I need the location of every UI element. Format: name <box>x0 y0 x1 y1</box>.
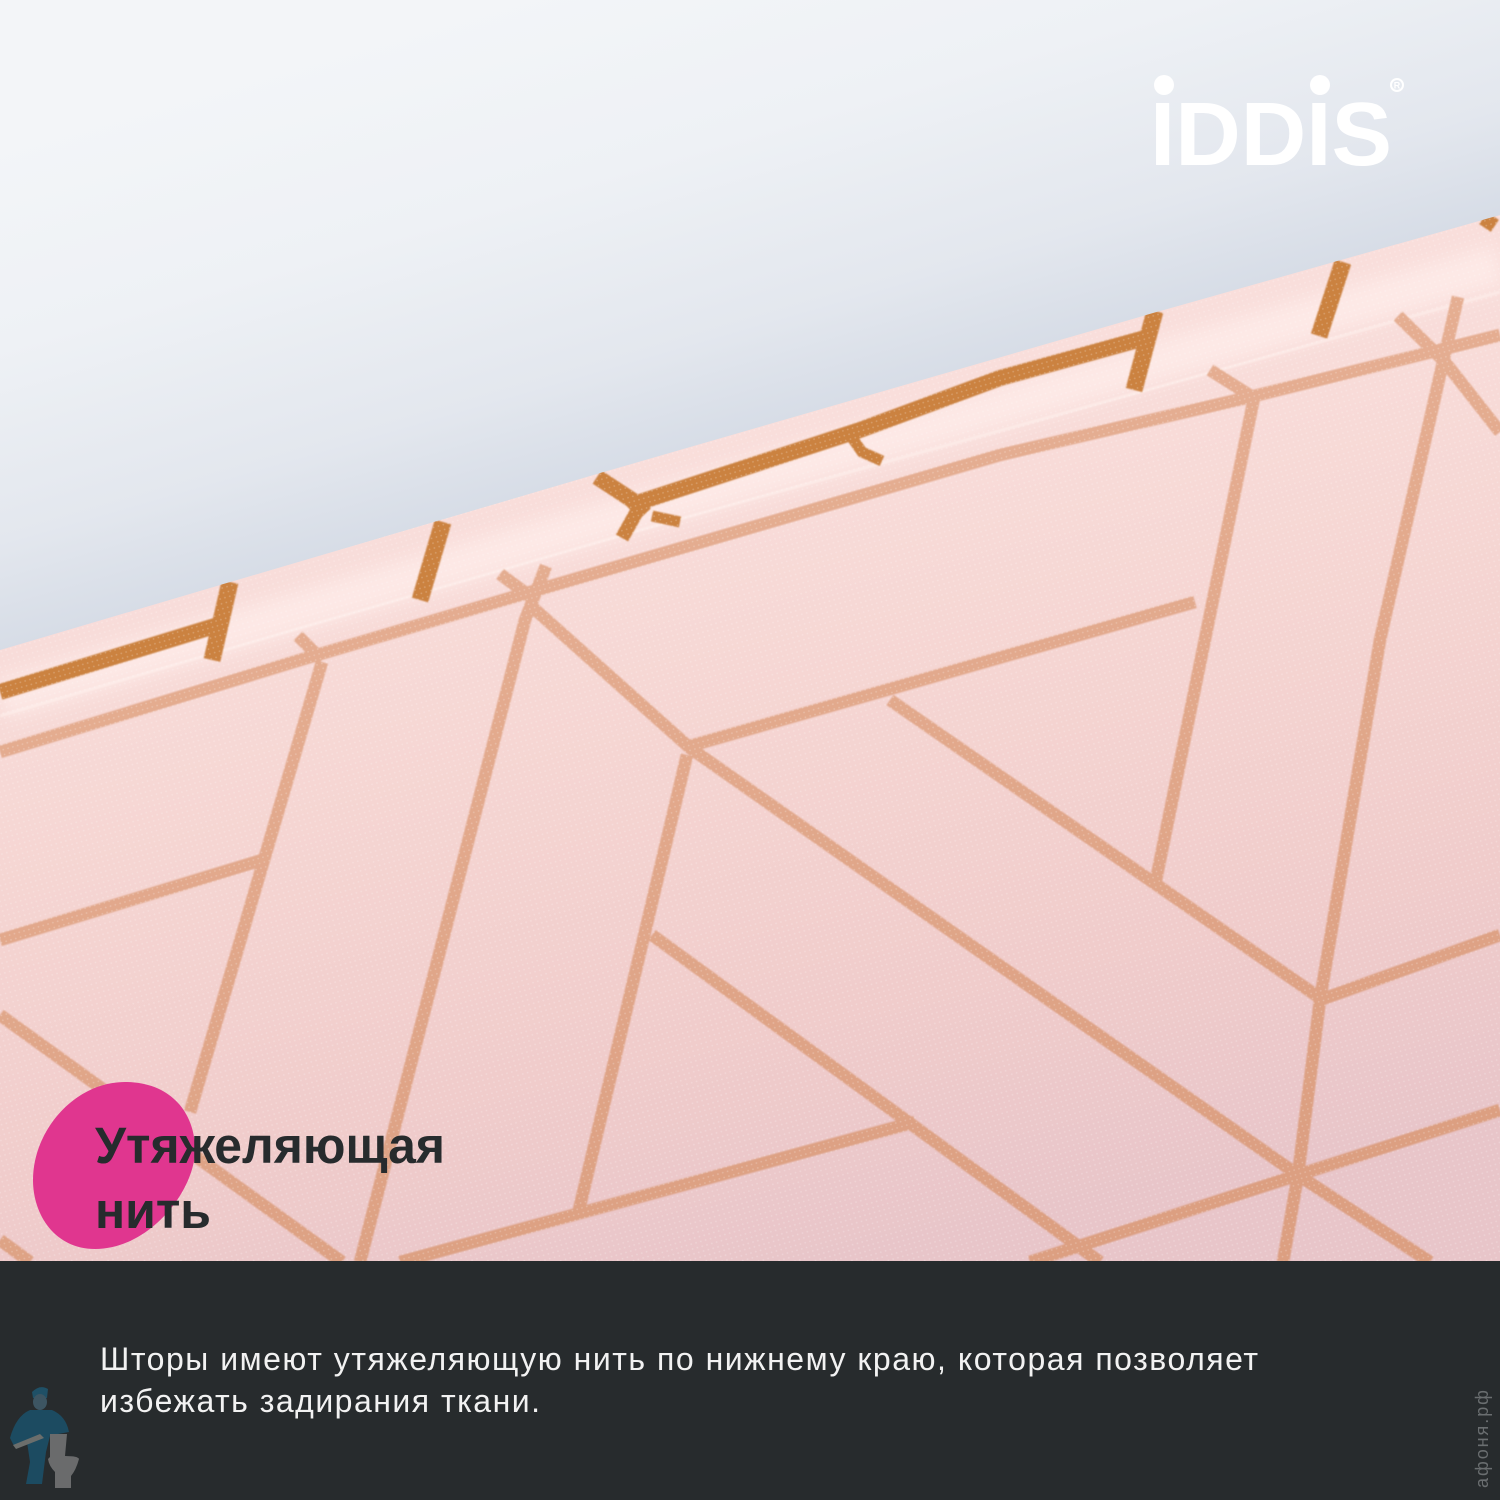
heading: нить <box>95 1182 211 1239</box>
background: pale grey-blue wall <box>0 0 1500 700</box>
watermark: site name: афоня.рф <box>1472 1390 1492 1488</box>
rolled hem highlight <box>0 265 1500 700</box>
heading <box>95 1117 445 1239</box>
stitched seam highlight <box>0 292 1500 716</box>
heading: Утяжеляющая <box>95 1117 445 1174</box>
orange hem stitching <box>0 216 1493 692</box>
icon: plumber with toilet watermark <box>10 1387 79 1488</box>
logo: IDDIS: IDDIS <box>1150 85 1392 185</box>
body text: Шторы имеют утяжеляющую нить по нижнему краю, которая позволяет <box>100 1341 1258 1377</box>
pink accent blob <box>33 1082 195 1249</box>
panel: dark footer band <box>0 1261 1500 1500</box>
panel: pink curtain fabric <box>0 215 1500 1262</box>
logo: IDDIS: R <box>1394 80 1401 90</box>
body text <box>100 1341 1258 1419</box>
weave texture <box>0 215 1500 1262</box>
body text: избежать задирания ткани. <box>100 1383 540 1419</box>
geometric line pattern <box>0 297 1500 1262</box>
